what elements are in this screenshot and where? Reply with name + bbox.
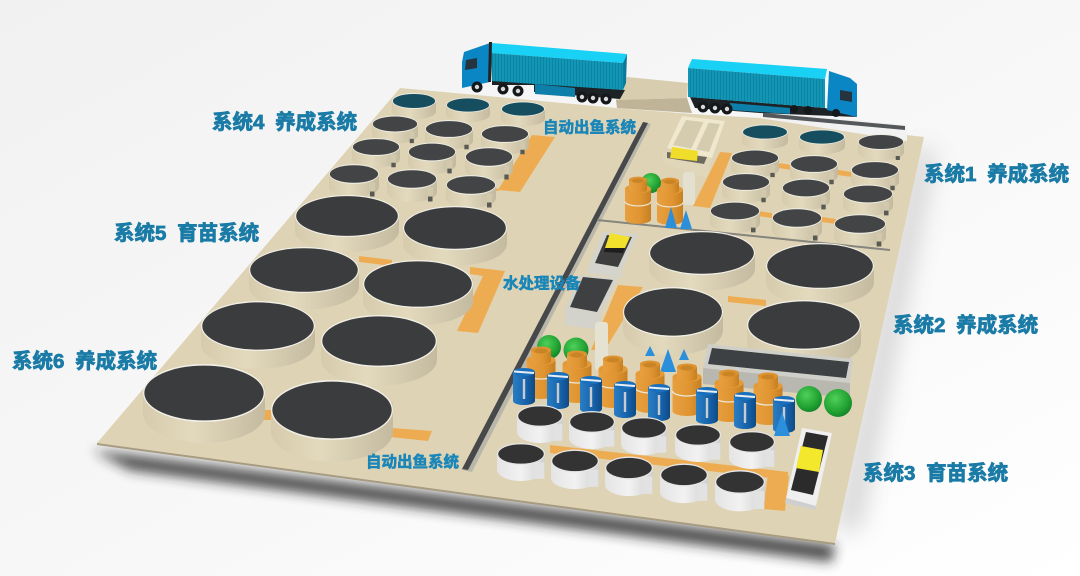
label: system 3: 系统3 育苗系统 bbox=[863, 461, 1008, 485]
wheels bbox=[472, 82, 612, 104]
white tanks: system 3 bbox=[497, 405, 775, 511]
green spheres rear bbox=[537, 335, 588, 362]
ground shadow bbox=[92, 450, 835, 562]
cone and green spheres front bbox=[774, 386, 852, 436]
truck right bbox=[688, 59, 857, 117]
label: system 1: 系统1 养成系统 bbox=[924, 162, 1069, 186]
tanks: system 2 bbox=[623, 231, 874, 368]
truck left bbox=[462, 42, 627, 104]
label: system 2: 系统2 养成系统 bbox=[893, 313, 1038, 337]
yellow machine box bbox=[785, 428, 832, 510]
cab bbox=[827, 71, 857, 117]
grey bed tank bbox=[703, 344, 853, 398]
trailer chassis bbox=[492, 80, 625, 99]
blue tanks bbox=[513, 368, 795, 433]
driveway block bbox=[616, 77, 692, 113]
tanks: system 1 bbox=[710, 124, 904, 247]
cones bbox=[645, 346, 689, 372]
container bbox=[491, 43, 627, 90]
orange filters row bbox=[526, 346, 782, 425]
label: system 4: 系统4 养成系统 bbox=[212, 110, 357, 134]
settling box with yellow unit bbox=[663, 116, 725, 178]
tanks: system 6 bbox=[143, 301, 437, 462]
label: auto fish harvest bottom: 自动出鱼系统 bbox=[366, 452, 460, 471]
container bbox=[688, 59, 827, 108]
tanks: system 5 bbox=[249, 195, 507, 325]
pipe rail bbox=[597, 219, 890, 251]
cab bbox=[462, 42, 492, 88]
wheels bbox=[698, 102, 840, 117]
bottom plate edge bbox=[97, 443, 835, 545]
conveyor: automatic fish harvesting bbox=[462, 122, 651, 472]
label: system 5: 系统5 育苗系统 bbox=[114, 221, 259, 245]
label: auto fish harvest top: 自动出鱼系统 bbox=[543, 118, 637, 136]
tanks: system 4 bbox=[329, 93, 545, 208]
orange filters rear bbox=[625, 172, 695, 229]
water treatment boxes bbox=[565, 232, 638, 370]
label: water treatment: 水处理设备 bbox=[503, 274, 581, 292]
right edge soft shadow bbox=[835, 150, 935, 530]
orange walkways bbox=[260, 135, 852, 511]
ground plate bbox=[97, 88, 924, 543]
label: system 6: 系统6 养成系统 bbox=[12, 349, 157, 373]
rear wall strip bbox=[760, 110, 907, 141]
